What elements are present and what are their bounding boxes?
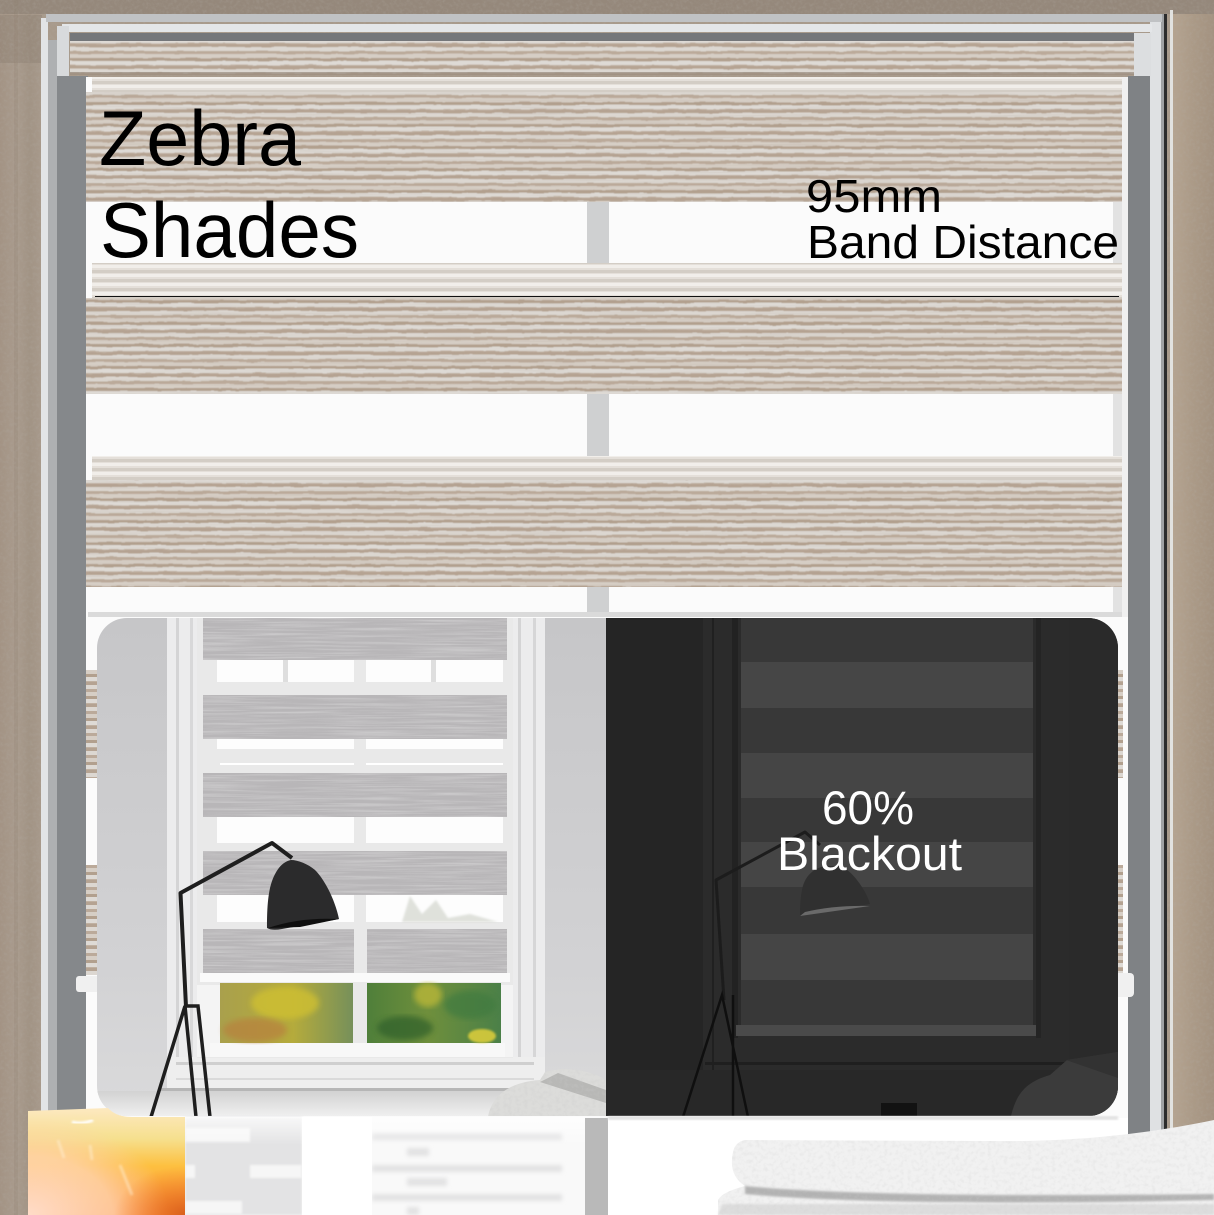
cushions [488, 1072, 606, 1116]
blurred lower panel [185, 1116, 1128, 1215]
fabric strips beside the panels [76, 670, 1134, 997]
window panes [217, 660, 503, 922]
title divider line [95, 296, 1119, 297]
band distance label: Band Distance [807, 216, 1119, 268]
panel: daylight room [97, 618, 606, 1117]
garden view [220, 983, 501, 1043]
dark window trim [1089, 618, 1118, 648]
title: Zebra [99, 94, 302, 182]
dark lamp [683, 832, 870, 1117]
dark zebra stripes [741, 618, 1033, 1025]
shade texture [203, 618, 507, 973]
fabric band 2 [76, 263, 1132, 404]
band distance label: 95mm [806, 170, 942, 222]
blackout label: 60% [822, 781, 914, 834]
title: Shades [100, 186, 359, 274]
panel: blackout room [606, 618, 1118, 1117]
towels [718, 1120, 1214, 1215]
fabric band 1 [76, 77, 1132, 212]
shade bottom rail [200, 973, 510, 982]
zebra shade bands [203, 618, 507, 973]
sheer gaps and centre mullion [86, 77, 1128, 1122]
dark cushions [1011, 1060, 1118, 1116]
candle [28, 1106, 185, 1215]
dark ornament [881, 1103, 917, 1116]
headrail [46, 14, 1162, 81]
dark bottom rail [736, 1025, 1036, 1036]
floor lamp [151, 843, 339, 1117]
blackout label: Blackout [777, 827, 962, 880]
fabric band 3 [76, 456, 1132, 597]
window trim [98, 618, 545, 1116]
